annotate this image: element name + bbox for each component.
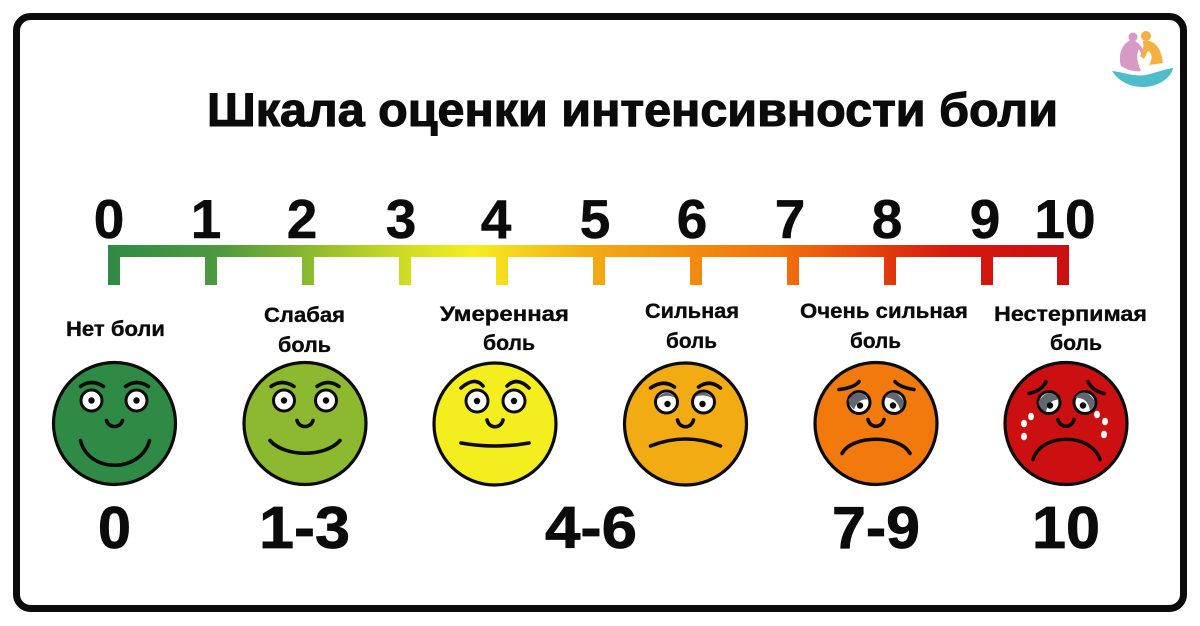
- face: dark green, big smile: [54, 362, 176, 484]
- label: mild pain: [264, 303, 345, 357]
- face: orange, frown: [815, 362, 937, 484]
- scale numbers 0-10: 0: [94, 188, 124, 250]
- label: mild pain: Слабая: [264, 303, 345, 327]
- title: Шкала оценки интенсивности боли: [207, 83, 1058, 136]
- label: moderate pain: [440, 302, 569, 355]
- gradient scale bar with ticks: [108, 245, 1069, 285]
- scale numbers 0-10: 5: [580, 188, 610, 250]
- range number: 1-3: 1-3: [259, 495, 350, 561]
- face: light green, smile: [244, 362, 366, 484]
- scale numbers 0-10: 1: [191, 188, 221, 250]
- label: severe pain: Сильная: [645, 299, 739, 323]
- range number: 4-6: 4-6: [545, 495, 637, 561]
- label: very severe pain: боль: [850, 329, 901, 353]
- scale numbers 0-10: 10: [1034, 188, 1096, 250]
- label: unbearable pain: боль: [1050, 331, 1102, 355]
- label: mild pain: боль: [278, 333, 331, 357]
- label: moderate pain: боль: [483, 331, 535, 355]
- label: very severe pain: [800, 299, 968, 353]
- face: red, crying: [1005, 362, 1127, 484]
- scale numbers 0-10: 6: [677, 188, 707, 250]
- scale numbers 0-10: 9: [970, 188, 1000, 250]
- scale numbers 0-10: 7: [775, 188, 805, 250]
- range number: 10: 10: [1032, 495, 1100, 561]
- label: unbearable pain: [994, 302, 1147, 355]
- scale numbers 0-10: 3: [386, 188, 416, 250]
- scale numbers 0-10: 4: [481, 188, 512, 250]
- label: moderate pain: Умеренная: [440, 302, 569, 326]
- range number: 0: 0: [98, 495, 131, 561]
- label: very severe pain: Очень сильная: [800, 299, 968, 323]
- label: severe pain: [645, 299, 739, 353]
- scale numbers 0-10: [94, 188, 1096, 250]
- face: yellow, neutral: [434, 363, 556, 485]
- label: no pain: Нет боли: [66, 317, 165, 341]
- scale numbers 0-10: 8: [872, 188, 902, 250]
- scale numbers 0-10: 2: [287, 188, 317, 250]
- label: severe pain: боль: [666, 329, 717, 353]
- range number: 7-9: 7-9: [832, 495, 920, 561]
- icon: logo with two figures and a hand: [1112, 31, 1173, 87]
- face: amber, slight frown: [624, 363, 746, 485]
- label: unbearable pain: Нестерпимая: [994, 302, 1147, 326]
